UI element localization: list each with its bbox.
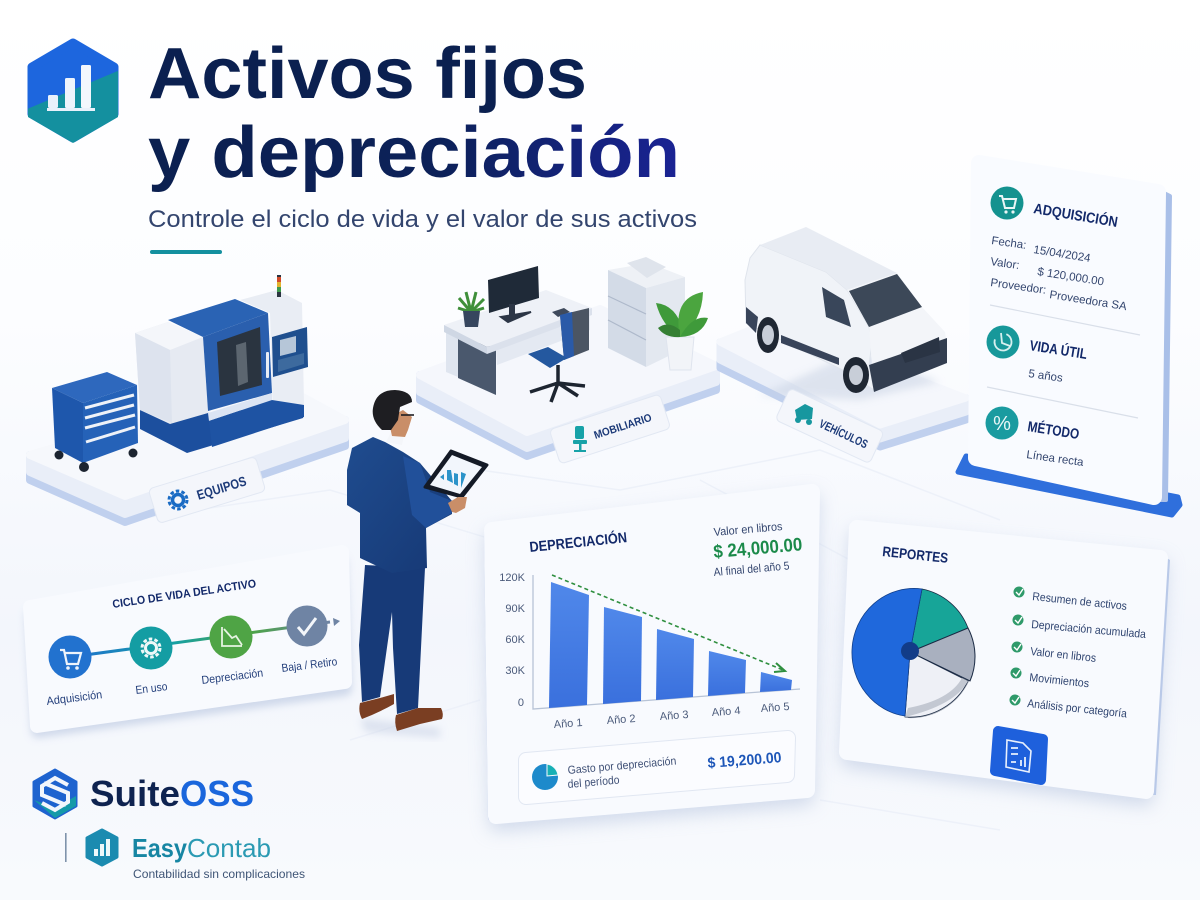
icon: small plant <box>458 292 484 327</box>
heading: DEPRECIACIÓN <box>529 528 628 556</box>
legs <box>359 565 425 714</box>
rear bumper and trim <box>746 307 758 333</box>
metodo text: Línea recta <box>1026 449 1085 469</box>
step: depreciacion <box>201 616 264 687</box>
door window <box>822 287 851 327</box>
bar chart: 90K <box>505 603 526 615</box>
office chair <box>528 308 589 402</box>
step: adquisicion: Adquisición <box>46 689 103 708</box>
checklist: Análisis por categoría <box>1027 698 1128 720</box>
accent rule <box>150 250 222 254</box>
vida util text: VIDA ÚTIL <box>1028 336 1089 363</box>
step: baja: Baja / Retiro <box>281 656 338 675</box>
expense box <box>526 738 788 797</box>
heading: CICLO DE VIDA DEL ACTIVO <box>112 578 257 611</box>
adquisicion text: ADQUISICIÓN <box>1032 199 1119 231</box>
adquisicion text: 15/04/2024 <box>1033 244 1092 265</box>
van <box>745 227 947 400</box>
expense box: $ 19,200.00 <box>707 749 782 772</box>
brand: EasyContab: Contab <box>187 833 271 863</box>
book value: Valor en libros <box>713 521 783 539</box>
panel: ciclo de vida <box>30 552 345 731</box>
bar chart: Año 2 <box>606 713 636 727</box>
title: Activos fijos <box>148 34 587 114</box>
wheels <box>757 317 779 353</box>
icon: cart <box>990 186 1024 220</box>
bar chart: Año 3 <box>659 709 689 723</box>
van body side <box>745 245 874 390</box>
bar chart: 30K <box>505 665 526 677</box>
checklist: Resumen de activos <box>1032 591 1128 613</box>
icon: suiteoss hexagon <box>34 770 76 818</box>
icon: pie <box>532 764 558 790</box>
step: depreciacion: Depreciación <box>201 668 264 687</box>
bar chart: 0 <box>518 697 524 709</box>
brand: SuiteOSS: OSS <box>180 773 254 814</box>
icon: chair <box>573 426 587 452</box>
windshield <box>849 274 922 327</box>
book value: $ 24,000.00 <box>713 533 803 562</box>
brand divider <box>65 833 67 862</box>
head <box>386 432 404 445</box>
desk <box>444 266 592 395</box>
shoes <box>359 694 394 719</box>
platform: equipos <box>30 275 345 522</box>
bar chart <box>499 572 800 731</box>
subtitle: Controle el ciclo de vida y el valor de sus activos <box>148 206 697 233</box>
panel: reportes <box>847 528 1170 799</box>
bar chart: 120K <box>499 572 526 584</box>
label: mobiliario: MOBILIARIO <box>593 412 654 442</box>
bar chart: 60K <box>505 634 526 646</box>
adquisicion text: Proveedor: <box>990 277 1047 297</box>
icon: clock <box>986 326 1020 358</box>
book value: Al final del año 5 <box>713 560 790 579</box>
expense box: Gasto por depreciación <box>567 756 677 777</box>
checklist: Valor en libros <box>1030 646 1097 665</box>
brand: EasyContab: Easy <box>132 833 187 863</box>
grille and bumper <box>869 338 947 392</box>
hand <box>448 497 467 513</box>
step: en uso: En uso <box>135 681 168 697</box>
trend arrow <box>552 575 785 672</box>
checklist: Movimientos <box>1029 672 1090 690</box>
step: baja <box>281 606 338 675</box>
adquisicion text: Proveedora SA <box>1049 289 1128 313</box>
title <box>148 34 680 193</box>
platform: vehiculos <box>720 227 966 447</box>
bar chart: Año 1 <box>553 717 583 731</box>
label: vehiculos: VEHÍCULOS <box>817 416 871 451</box>
panel: depreciacion <box>487 492 812 824</box>
icon: percent <box>986 406 1018 440</box>
adquisicion text: Fecha: <box>991 235 1027 252</box>
vida util text: 5 años <box>1028 368 1064 385</box>
label: equipos: EQUIPOS <box>195 474 248 503</box>
van hood <box>847 273 947 365</box>
filing cabinet <box>608 257 685 367</box>
brand: SuiteOSS <box>34 770 254 818</box>
step: en uso <box>130 626 172 697</box>
label: mobiliario <box>549 394 671 464</box>
expense box: del período <box>567 775 620 791</box>
checklist <box>1010 586 1147 720</box>
bar chart: Año 5 <box>760 701 790 715</box>
bar chart: Año 4 <box>711 705 741 719</box>
tablet <box>425 451 487 497</box>
adquisicion text <box>990 199 1128 313</box>
metodo text <box>1026 418 1085 469</box>
machine <box>135 275 308 453</box>
vida util text <box>1028 336 1089 385</box>
icon: percent: % <box>993 413 1011 435</box>
platform: mobiliario <box>420 257 716 456</box>
title: y depreciación <box>148 113 680 193</box>
icon: easycontab hexagon <box>87 830 117 865</box>
checklist: Depreciación acumulada <box>1031 619 1147 641</box>
adquisicion text: Valor: <box>990 256 1020 272</box>
icon: gear <box>169 491 187 509</box>
label: equipos <box>148 456 266 524</box>
pie chart <box>852 588 975 718</box>
tool cabinet <box>52 372 138 472</box>
adquisicion text: $ 120,000.00 <box>1037 266 1105 288</box>
step: adquisicion <box>46 636 103 708</box>
jacket <box>347 437 452 573</box>
logo icon: hexagon with bars <box>28 38 118 143</box>
potted plant <box>656 292 708 370</box>
panel: activo detail <box>958 163 1180 515</box>
heading: REPORTES <box>882 543 949 566</box>
brand: EasyContab: Contabilidad sin complicaciones <box>133 867 305 881</box>
metodo text: MÉTODO <box>1026 418 1080 443</box>
timeline <box>46 606 340 708</box>
van roof <box>760 227 897 290</box>
label: vehiculos <box>775 388 884 464</box>
icon: truck <box>795 404 813 425</box>
brand: SuiteOSS: Suite <box>90 773 180 814</box>
brand: EasyContab <box>87 830 305 881</box>
person with tablet <box>347 390 487 738</box>
book value <box>713 521 803 579</box>
icon: report document <box>995 731 1043 780</box>
